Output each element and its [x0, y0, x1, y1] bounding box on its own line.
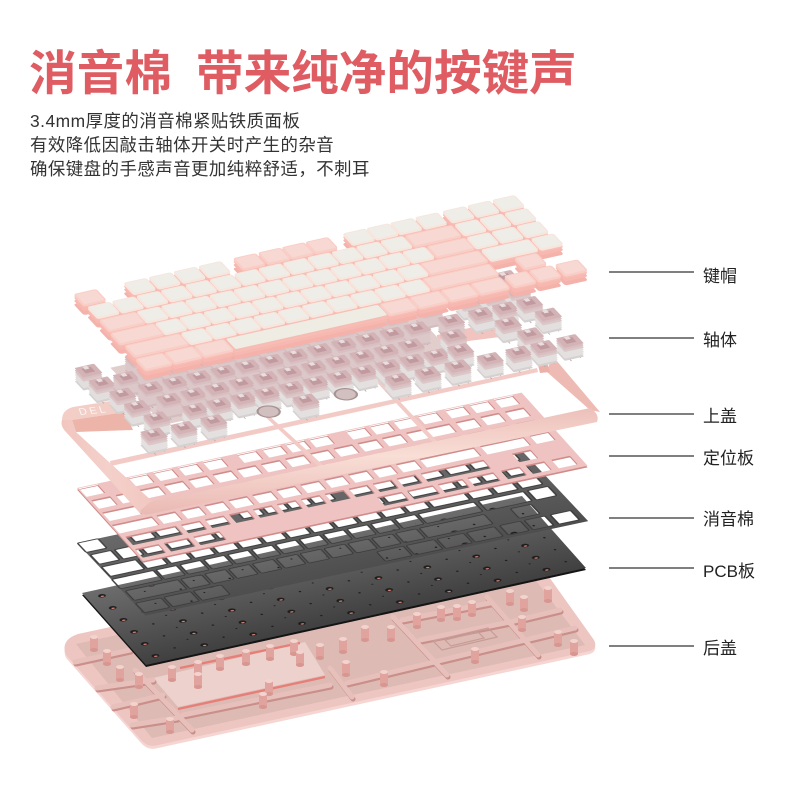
label leader lines	[609, 272, 694, 646]
label: switches: 轴体	[703, 331, 737, 350]
frame thin cross bars	[110, 368, 538, 468]
description text: 有效降低因敲击轴体开关时产生的杂音	[30, 135, 334, 155]
layer: PCB board	[82, 496, 586, 667]
layer: keycaps	[74, 195, 587, 380]
layer: bottom case	[64, 540, 595, 749]
case floor	[76, 549, 585, 738]
description text: 确保键盘的手感声音更加纯粹舒适，不刺耳	[30, 159, 370, 179]
case lip	[64, 543, 595, 749]
frame left corner top face	[62, 400, 125, 420]
frame right rail	[537, 359, 600, 412]
frame back bar piece	[437, 322, 500, 345]
frame logo: DEL	[77, 404, 110, 418]
switch row 4	[133, 327, 556, 439]
layer: mounting plate	[77, 393, 588, 563]
description text	[30, 111, 370, 179]
keycap tops	[74, 195, 587, 370]
switch row 5	[130, 334, 595, 456]
frame left rail	[62, 420, 153, 515]
title: 消音棉	[29, 48, 172, 101]
switch row 1	[78, 283, 543, 405]
layer: key switches	[65, 268, 598, 457]
layer: sound-dampening foam	[77, 448, 588, 616]
keycap base and glow	[74, 205, 587, 380]
case rim	[64, 540, 595, 746]
keycap skirts	[74, 196, 587, 371]
description text: 3.4mm厚度的消音棉紧贴铁质面板	[30, 111, 300, 131]
raised battery plateau	[153, 642, 325, 709]
title	[29, 48, 577, 101]
switch row 3	[113, 307, 574, 428]
switch backing haze	[110, 302, 457, 425]
title: 带来纯净的按键声	[196, 48, 577, 101]
frame left corner front face	[72, 412, 133, 432]
layer: top frame	[62, 322, 600, 515]
case ribs	[75, 597, 576, 732]
label: PCB: PCB板	[703, 562, 755, 581]
switch row 0	[65, 270, 531, 392]
label: bottom cover: 后盖	[703, 639, 737, 658]
label: plate: 定位板	[703, 449, 754, 468]
switch row 2	[99, 296, 555, 416]
screw posts	[90, 586, 578, 734]
connector outline on floor	[433, 628, 497, 650]
label: keycaps: 键帽	[703, 267, 737, 286]
label: foam: 消音棉	[703, 510, 754, 529]
frame front bar	[140, 408, 598, 515]
label: top cover: 上盖	[703, 407, 737, 426]
